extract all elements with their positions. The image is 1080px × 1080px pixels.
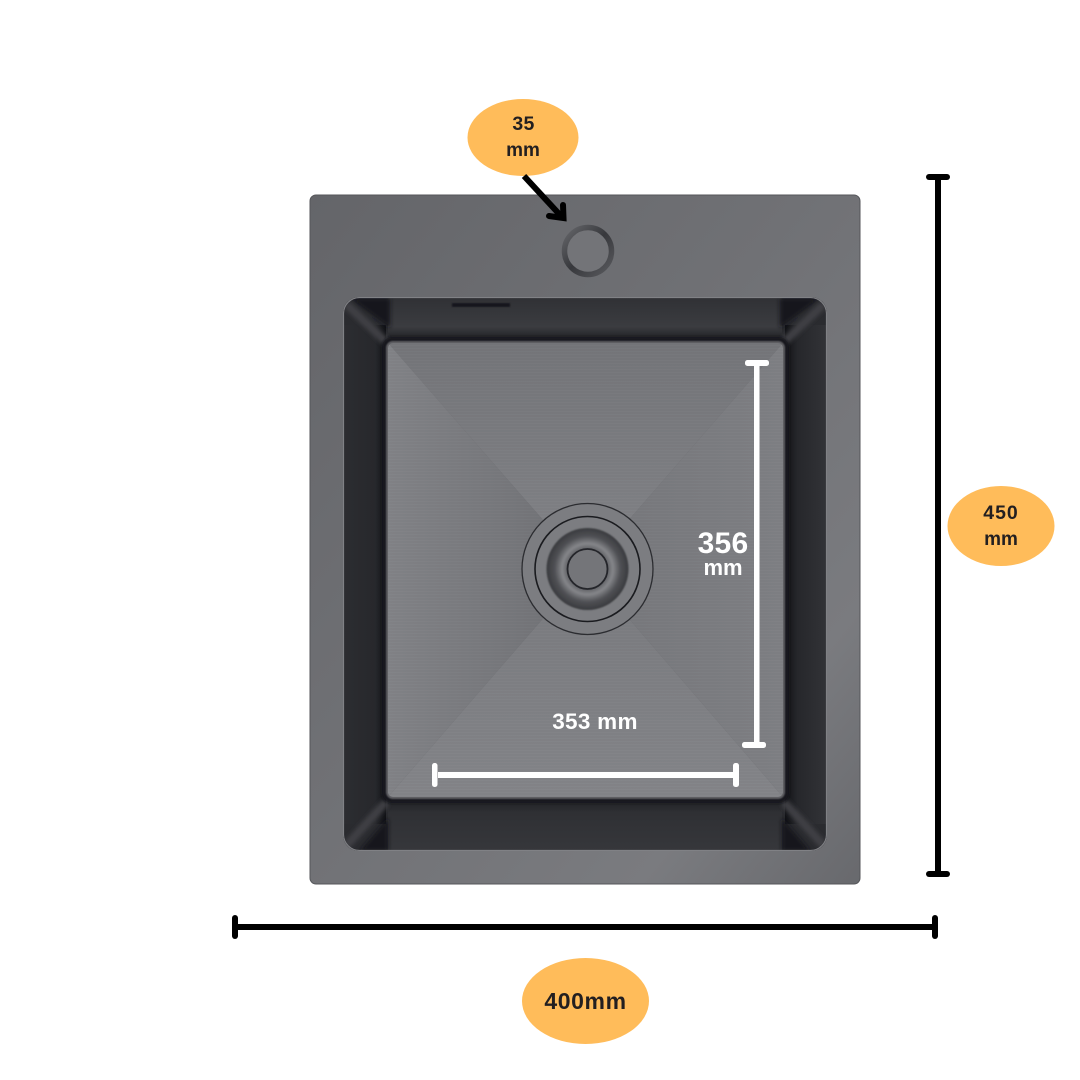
dimension: 450 mm height line (926, 174, 950, 877)
badge: 35 mm (468, 99, 578, 176)
label: 353 mm: 353 mm (552, 709, 638, 734)
icon: drain (522, 504, 653, 634)
panel: basin walls (343, 297, 827, 851)
badge: 35 mm: mm (506, 140, 540, 161)
badge: 400mm: 400mm (544, 988, 627, 1014)
icon: tap hole ring (564, 228, 612, 274)
dimension: 356 mm height line (742, 360, 769, 748)
arrow: to tap hole (524, 176, 564, 218)
label: 356 mm (698, 527, 748, 580)
badge: 400mm (522, 958, 649, 1044)
panel: sink deck (310, 195, 860, 884)
badge: 450 mm: 450 (983, 502, 1019, 524)
label: 356 mm: mm (703, 555, 743, 580)
label: 356 mm: 356 (698, 527, 748, 560)
panel: basin floor (382, 337, 789, 803)
badge: 450 mm: mm (984, 529, 1018, 550)
badge: 35 mm: 35 (512, 113, 535, 135)
dimension: 353 mm width line (432, 763, 739, 787)
logo mark on basin wall (452, 303, 510, 307)
badge: 450 mm (948, 486, 1054, 566)
dimension: 400 mm width line (232, 915, 938, 939)
sink (310, 195, 860, 884)
